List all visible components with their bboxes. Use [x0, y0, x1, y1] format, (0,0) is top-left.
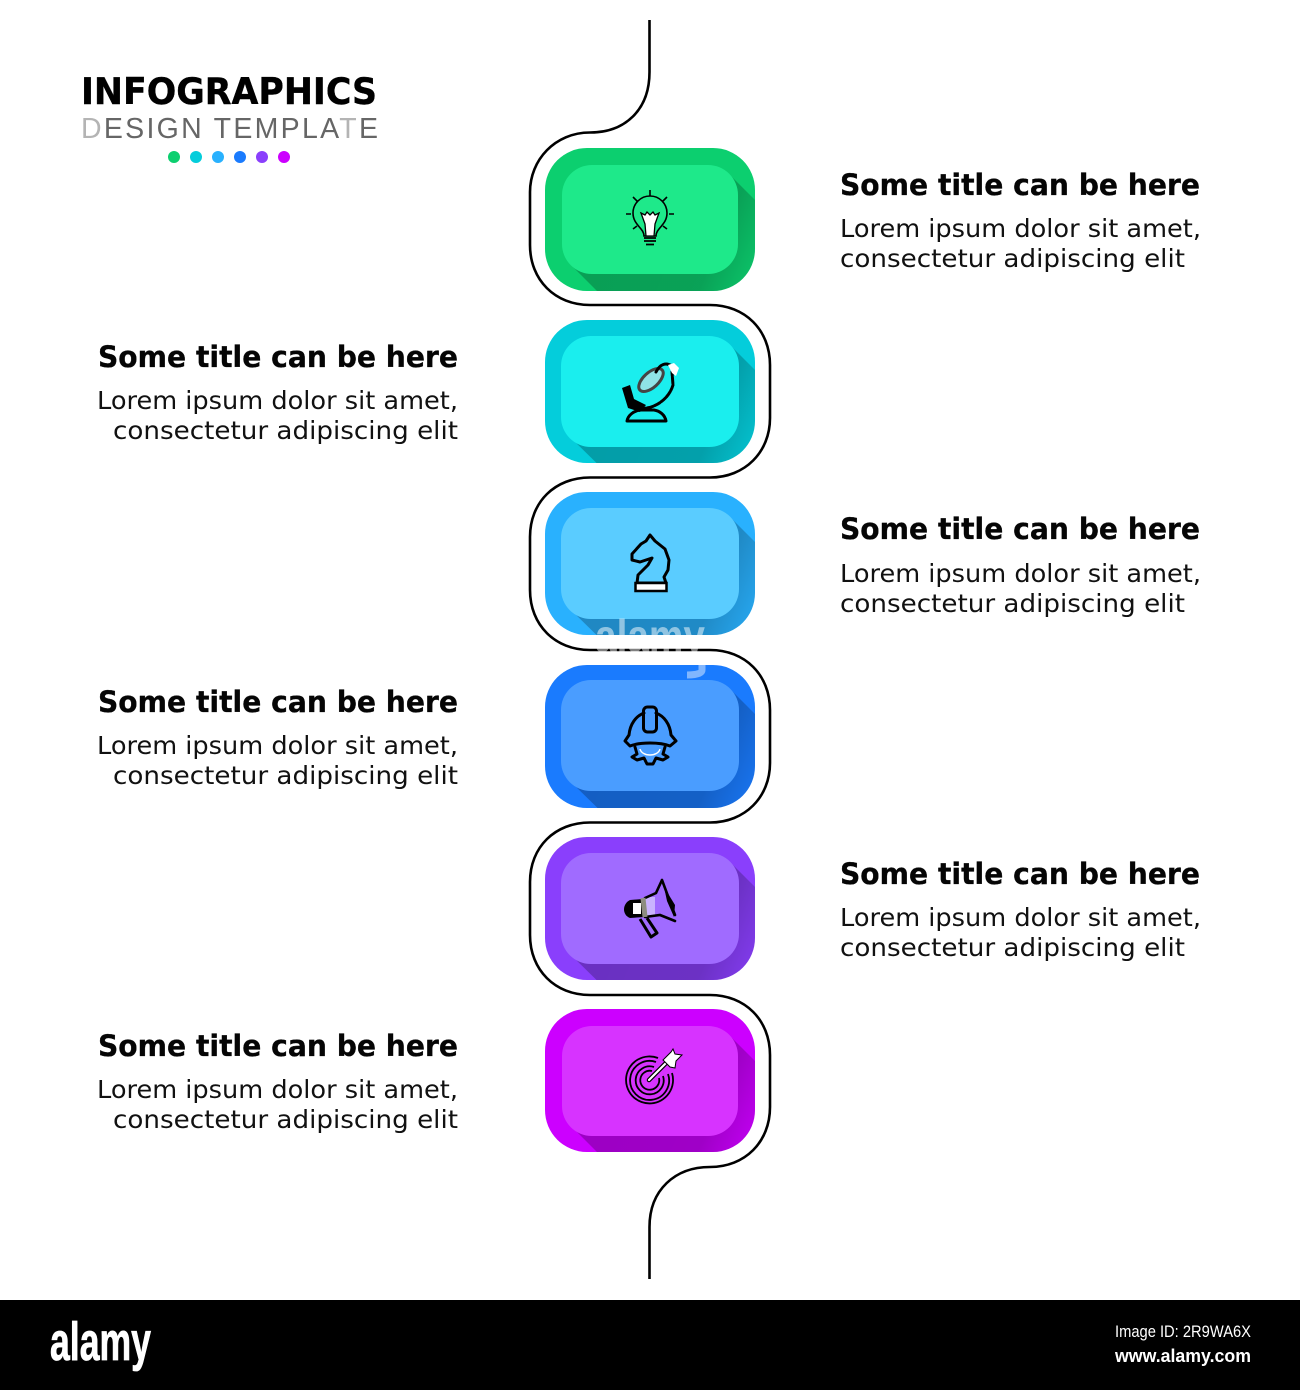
footer url: www.alamy.com	[1114, 1346, 1251, 1366]
watermark over the centre	[595, 610, 705, 675]
text block: step 5: Some title can be here	[840, 857, 1200, 891]
colour dots	[168, 151, 290, 163]
text block: step 2: Some title can be here	[98, 340, 458, 374]
text block: step 6: Some title can be here	[98, 1029, 458, 1063]
step 1 box: green	[545, 148, 755, 291]
heading: infographics design template	[81, 70, 378, 163]
icon: chess knight	[632, 535, 669, 591]
text block: step 3	[840, 512, 1201, 618]
text block: step 4: Some title can be here	[98, 685, 458, 719]
text block: step 4	[97, 685, 458, 790]
step 6 box: magenta	[545, 1009, 755, 1152]
text block: step 5: Lorem ipsum dolor sit amet,	[840, 903, 1201, 932]
step 4 box: blue	[545, 665, 755, 808]
text block: step 5: consectetur adipiscing elit	[840, 933, 1185, 962]
footer bar	[0, 1300, 1300, 1390]
footer logo: alamy	[50, 1312, 151, 1372]
icon: satellite dish	[622, 363, 679, 421]
text block: step 2: consectetur adipiscing elit	[113, 416, 458, 445]
step 2 box: cyan	[545, 320, 755, 463]
icon: target with arrow	[626, 1049, 682, 1103]
text block: step 3: Lorem ipsum dolor sit amet,	[840, 559, 1201, 588]
text block: step 6: Lorem ipsum dolor sit amet,	[97, 1075, 458, 1104]
text block: step 2	[97, 340, 458, 445]
text block: step 1	[840, 168, 1201, 273]
heading subtitle: DESIGN TEMPLATE	[81, 113, 378, 145]
text block: step 4: Lorem ipsum dolor sit amet,	[97, 731, 458, 760]
step 3 box: sky blue	[545, 492, 755, 635]
text block: step 2: Lorem ipsum dolor sit amet,	[97, 386, 458, 415]
text block: step 3: Some title can be here	[840, 512, 1200, 546]
text block: step 6	[97, 1029, 458, 1134]
icon: light bulb	[626, 190, 674, 244]
step 5 box: purple	[545, 837, 755, 980]
text block: step 4: consectetur adipiscing elit	[113, 761, 458, 790]
watermark over the centre: alamy	[595, 610, 705, 662]
text block: step 6: consectetur adipiscing elit	[113, 1105, 458, 1134]
text block: step 3: consectetur adipiscing elit	[840, 589, 1185, 618]
connector line snaking around the steps	[530, 20, 770, 1279]
text block: step 1: Some title can be here	[840, 168, 1200, 202]
footer image id: Image ID: 2R9WA6X	[1115, 1322, 1251, 1341]
heading title: INFOGRAPHICS	[81, 70, 377, 113]
icon: hard hat with gear	[625, 707, 676, 764]
text block: step 1: consectetur adipiscing elit	[840, 244, 1185, 273]
icon: megaphone	[624, 880, 675, 937]
text block: step 5	[840, 857, 1201, 962]
text block: step 1: Lorem ipsum dolor sit amet,	[840, 214, 1201, 243]
